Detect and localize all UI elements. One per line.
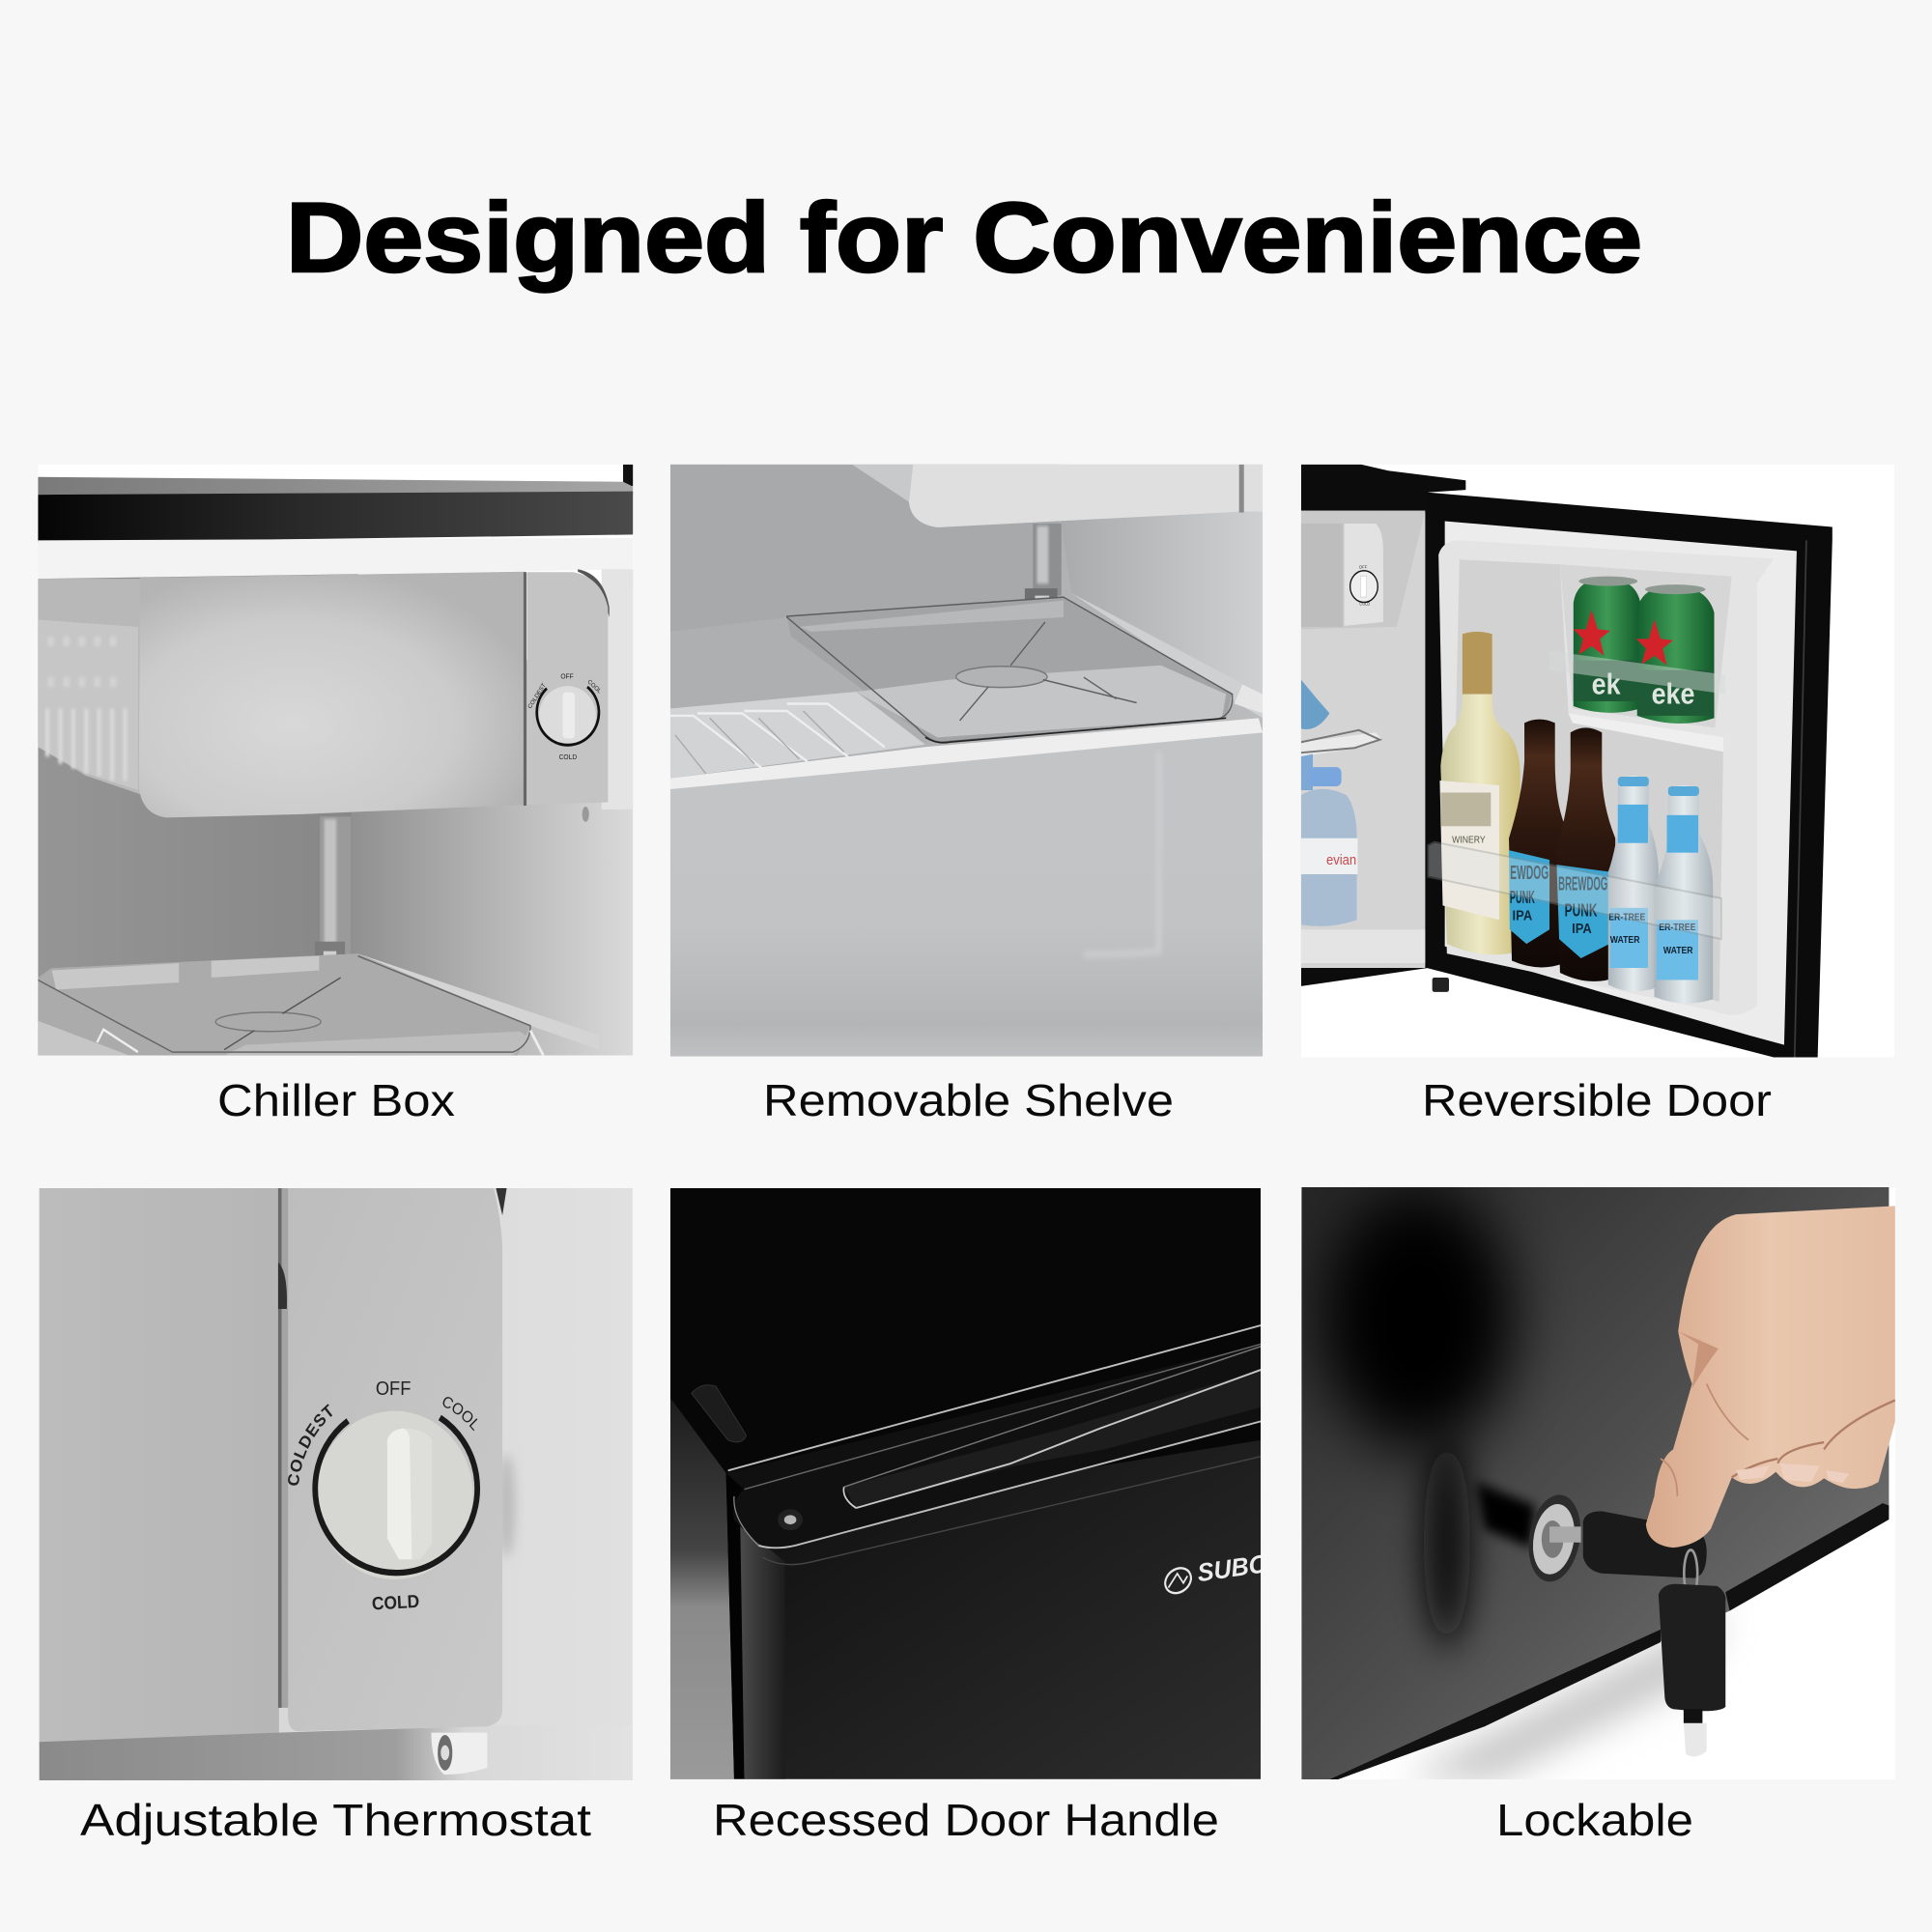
caption: Chiller Box: Chiller Box <box>217 1075 455 1125</box>
beer bottles <box>1509 720 1615 981</box>
wine bottle <box>1439 632 1520 954</box>
key ring <box>1684 1550 1697 1597</box>
tonic water bottles: WATER <box>1663 946 1693 955</box>
hand holding key <box>1646 1206 1895 1548</box>
beer bottles: BREWDOG <box>1558 872 1607 895</box>
recessed handle <box>726 1325 1261 1565</box>
beer cans: eke <box>1652 678 1694 711</box>
panel: removable shelf photo <box>670 464 1263 1057</box>
lock cylinder <box>1521 1490 1587 1587</box>
chiller unit with dial <box>1301 524 1383 627</box>
beer bottles: IPA <box>1572 920 1592 936</box>
thermostat dial: OFF <box>376 1379 411 1400</box>
thermostat housing <box>524 569 610 806</box>
tonic water bottles: ER-TREE <box>1608 912 1645 922</box>
corner foot <box>692 1385 747 1442</box>
panel: reversible door photo <box>1300 464 1833 1057</box>
panel: lockable photo <box>1301 1187 1895 1779</box>
beer cans: ek <box>1592 668 1621 701</box>
door front <box>740 1440 1261 1779</box>
chiller unit with dial: COLD <box>1359 601 1370 607</box>
caption: Lockable: Lockable <box>1496 1795 1693 1845</box>
fridge body and top <box>1301 465 1465 992</box>
door bins <box>1428 842 1721 939</box>
key fob in lock <box>1583 1511 1707 1578</box>
caption: Removable Shelve: Removable Shelve <box>763 1075 1174 1125</box>
thermostat housing <box>288 1188 502 1731</box>
chiller box ribbed side <box>38 579 142 795</box>
panel: chiller box photo <box>38 464 634 1056</box>
chiller unit with dial: OFF <box>1359 564 1368 570</box>
brand logo: SUBC <box>1196 1550 1268 1588</box>
glass shelf <box>38 953 599 1056</box>
thermostat dial: COLDEST <box>526 682 548 710</box>
brand logo <box>1162 1550 1268 1598</box>
thermostat dial: COOL <box>442 1397 477 1432</box>
tonic water bottles: WATER <box>1610 935 1640 945</box>
chiller box front <box>139 572 526 817</box>
lower compartment <box>670 732 1263 1057</box>
chiller box underside <box>852 465 1263 527</box>
tonic water bottles <box>1608 776 1713 1004</box>
thermostat dial: COLD <box>559 753 577 761</box>
transparent shelf tray <box>787 597 1233 743</box>
beer cans <box>1549 577 1725 724</box>
beer bottles: EWDOG <box>1510 862 1548 883</box>
beer bottles: PUNK <box>1565 899 1598 921</box>
shadow below fridge <box>1401 1608 1727 1779</box>
water bottles on fridge shelf: evian <box>1326 851 1356 867</box>
panel: recessed door handle photo <box>670 1188 1268 1779</box>
caption: Reversible Door: Reversible Door <box>1422 1075 1772 1125</box>
tonic water bottles: ER-TREE <box>1659 923 1695 932</box>
screw <box>431 1733 487 1775</box>
thermostat dial: OFF <box>560 672 574 681</box>
wine bottle: WINERY <box>1452 835 1486 845</box>
wire shelf <box>670 685 1263 789</box>
support post <box>1025 524 1062 617</box>
thermostat dial: COLDEST <box>288 1404 332 1486</box>
thermostat dial: COLD <box>371 1591 420 1614</box>
support post <box>315 816 351 976</box>
hanging key <box>1659 1584 1725 1756</box>
thermostat dial <box>526 672 603 761</box>
thermostat dial: COOL <box>586 678 603 696</box>
thermostat dial <box>288 1379 480 1614</box>
fridge body <box>1301 1187 1889 1779</box>
beer bottles: PUNK <box>1510 887 1535 907</box>
water bottles on fridge shelf <box>1301 680 1382 926</box>
title: Designed for Convenience <box>286 183 1642 293</box>
panel: adjustable thermostat photo <box>39 1188 633 1780</box>
beer bottles: IPA <box>1513 906 1532 923</box>
open door <box>1427 493 1833 1057</box>
caption: Recessed Door Handle: Recessed Door Handle <box>713 1795 1219 1845</box>
caption: Adjustable Thermostat: Adjustable Thermostat <box>80 1795 591 1845</box>
